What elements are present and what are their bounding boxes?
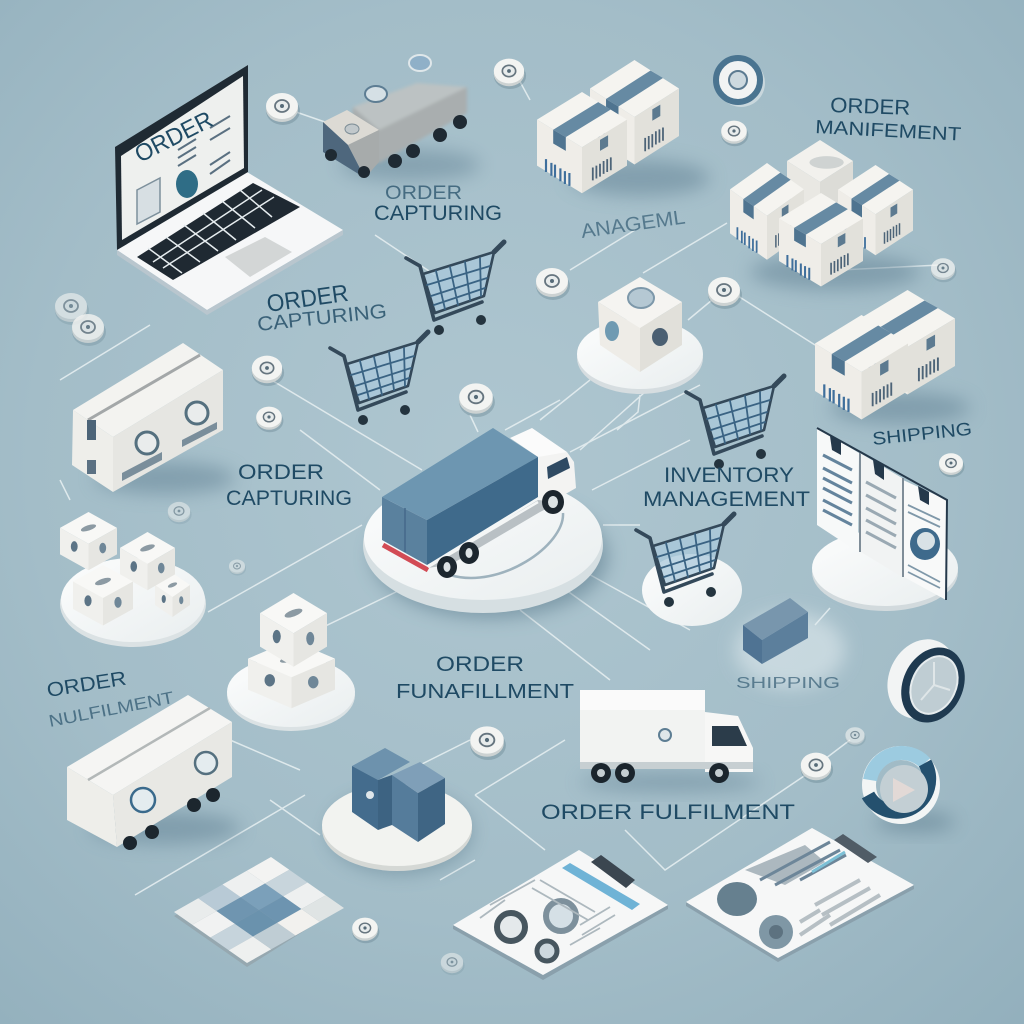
icon: box truck left	[67, 695, 240, 850]
icon: faded truck	[323, 55, 480, 181]
label: order management	[815, 94, 962, 146]
icon: documents on pedestal	[812, 428, 958, 611]
icon: boxes cluster right	[730, 140, 920, 290]
icon: boxes top	[537, 60, 710, 196]
label: order capturing left: CAPTURING	[226, 487, 352, 510]
label: inventory management: INVENTORY	[664, 464, 794, 487]
icon: blue boxes on platform	[322, 748, 472, 874]
icon: cart 3	[686, 376, 784, 469]
label: order fulfillment centre: FUNAFILLMENT	[396, 681, 574, 703]
label: order nulfilment: ORDER	[45, 668, 128, 702]
label: order capturing mid: CAPTURING	[256, 301, 388, 336]
label: shipping right: SHIPPING	[871, 419, 973, 449]
label: order fulfillment centre: ORDER	[436, 653, 524, 676]
icon: ring dark	[875, 628, 977, 733]
icon: laptop	[115, 65, 343, 315]
icon: ring top right	[716, 58, 765, 107]
icon: checker mat	[174, 857, 344, 967]
icon: cube on pedestal	[577, 277, 703, 394]
label: shipping small: SHIPPING	[736, 675, 840, 692]
label: order capturing top: CAPTURING	[374, 202, 502, 225]
icon: node markers	[55, 59, 964, 975]
label: order capturing top	[374, 183, 502, 225]
label: inventory management	[643, 464, 810, 511]
icon: document chart	[686, 828, 914, 962]
label: order nulfilment: NULFILMENT	[47, 688, 175, 731]
label: order capturing left	[226, 461, 352, 510]
icon: document clipboard	[453, 850, 668, 980]
icon: ring blue	[868, 753, 955, 832]
icon: blue package with glow	[735, 598, 845, 688]
icon: cart 1	[406, 242, 504, 335]
icon: cubes on platform	[60, 512, 206, 647]
label: order fulfillment centre	[396, 653, 574, 703]
icon: white delivery truck	[580, 690, 760, 791]
label: faded management: ANAGEML	[580, 207, 687, 243]
label: order management: MANIFEMENT	[815, 117, 962, 146]
label: order capturing top: ORDER	[385, 183, 462, 204]
label: order management: ORDER	[830, 94, 911, 120]
label: order capturing mid	[256, 280, 388, 336]
connector lines	[60, 78, 940, 895]
label: order nulfilment	[45, 668, 175, 731]
label: order fulfilment: ORDER FULFILMENT	[541, 801, 795, 824]
icon: cart 2	[330, 332, 428, 425]
label: order capturing left: ORDER	[238, 461, 324, 484]
icon: boxes right	[815, 290, 970, 424]
label: inventory management: MANAGEMENT	[643, 488, 810, 511]
icon: laptop: ORDER	[130, 106, 218, 168]
icon: cart 4 on platform	[636, 514, 742, 626]
label: order capturing mid: ORDER	[265, 280, 350, 318]
icon: central truck on platform	[363, 428, 608, 618]
icon: large box left	[72, 343, 235, 494]
icon: stacked cubes on platform	[227, 593, 355, 731]
